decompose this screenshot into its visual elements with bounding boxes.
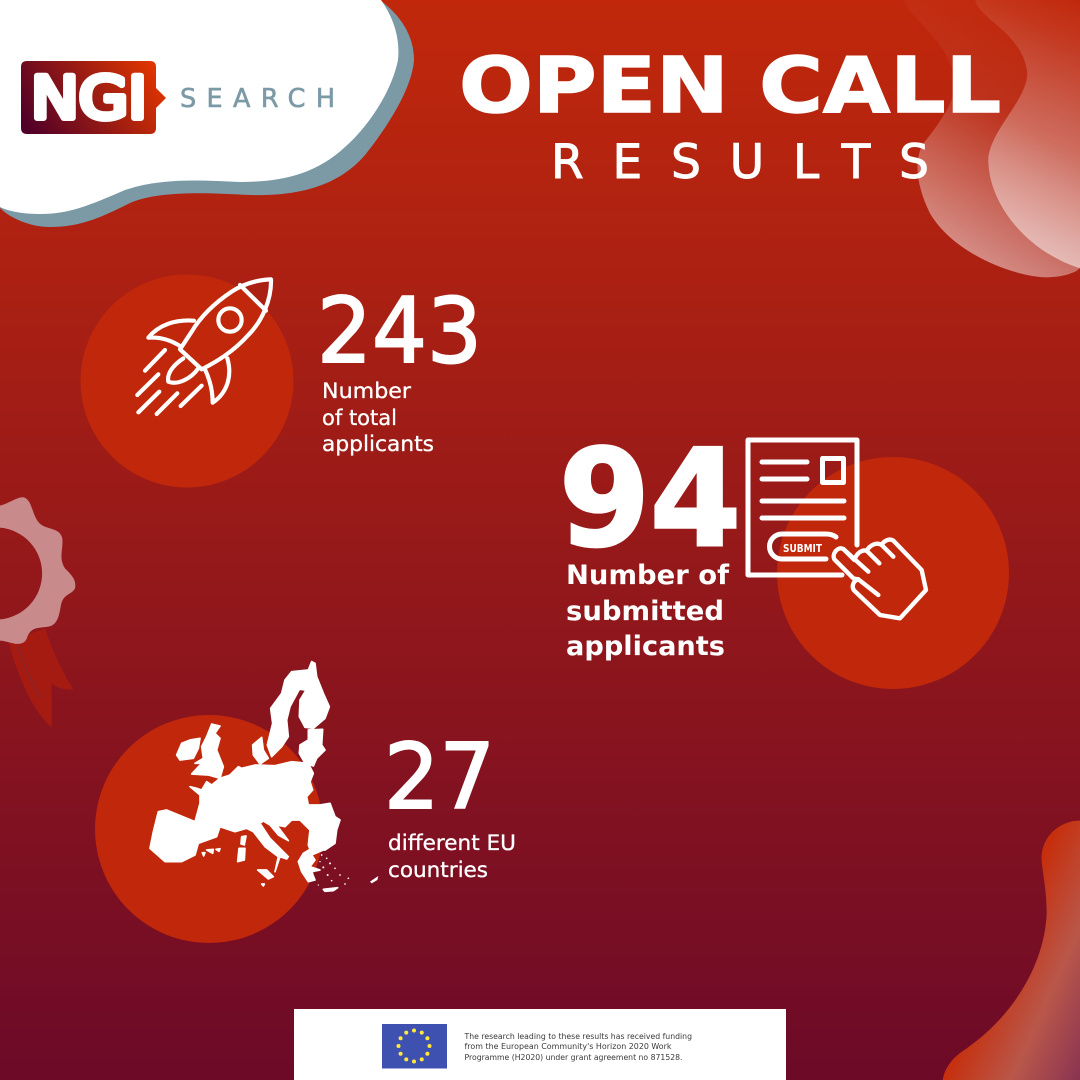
funding text: Programme (H2020) under grant agreement no 871528. <box>464 1053 682 1062</box>
icon: map of Europe <box>150 662 378 891</box>
label: applicants <box>322 432 434 456</box>
label <box>566 560 729 662</box>
icon: EU flag <box>382 1024 447 1068</box>
label: applicants <box>566 631 725 662</box>
number 243: 243 <box>317 279 482 384</box>
label: Number <box>322 379 411 403</box>
label <box>388 831 516 882</box>
logo SEARCH text: SEARCH <box>180 84 335 114</box>
icon: rocket <box>137 279 271 414</box>
rosette ribbon <box>8 628 73 727</box>
label <box>322 379 434 456</box>
logo: NGI Search <box>21 61 335 134</box>
header logo blob <box>0 0 414 227</box>
decorative blobs: top right <box>904 0 1080 277</box>
blob shadow <box>0 0 414 227</box>
number 94: 94 <box>559 421 741 577</box>
funding text: The research leading to these results has received funding <box>463 1032 692 1041</box>
stat: submitted applicants <box>559 421 1009 689</box>
decorative blob: bottom right <box>943 821 1080 1080</box>
circle <box>80 274 294 488</box>
circle <box>95 715 323 943</box>
icon: submit form and hand: SUBMIT <box>783 543 823 555</box>
label: submitted <box>566 596 724 627</box>
icon: submit form and hand <box>748 440 926 618</box>
funding text: from the European Community's Horizon 2020 Work <box>464 1042 672 1051</box>
stat: total applicants <box>80 274 482 488</box>
label: of total <box>322 406 397 430</box>
title line 2: RESULTS <box>551 135 929 190</box>
funding text <box>463 1032 692 1062</box>
title <box>459 42 1001 190</box>
circle <box>777 457 1009 689</box>
label: countries <box>388 858 488 882</box>
footer panel <box>294 1009 786 1080</box>
logo badge <box>21 61 166 134</box>
title line 1: OPEN CALL <box>459 42 1001 131</box>
label: Number of <box>566 560 729 591</box>
white blob <box>0 0 398 214</box>
rosette gear <box>0 497 75 644</box>
stat: EU countries <box>95 662 516 943</box>
footer: funding notice <box>294 1009 786 1080</box>
logo NGI text: NGI <box>31 64 147 132</box>
decorative rosette: left edge <box>0 497 75 727</box>
label: different EU <box>388 831 516 855</box>
number 27: 27 <box>384 725 495 830</box>
